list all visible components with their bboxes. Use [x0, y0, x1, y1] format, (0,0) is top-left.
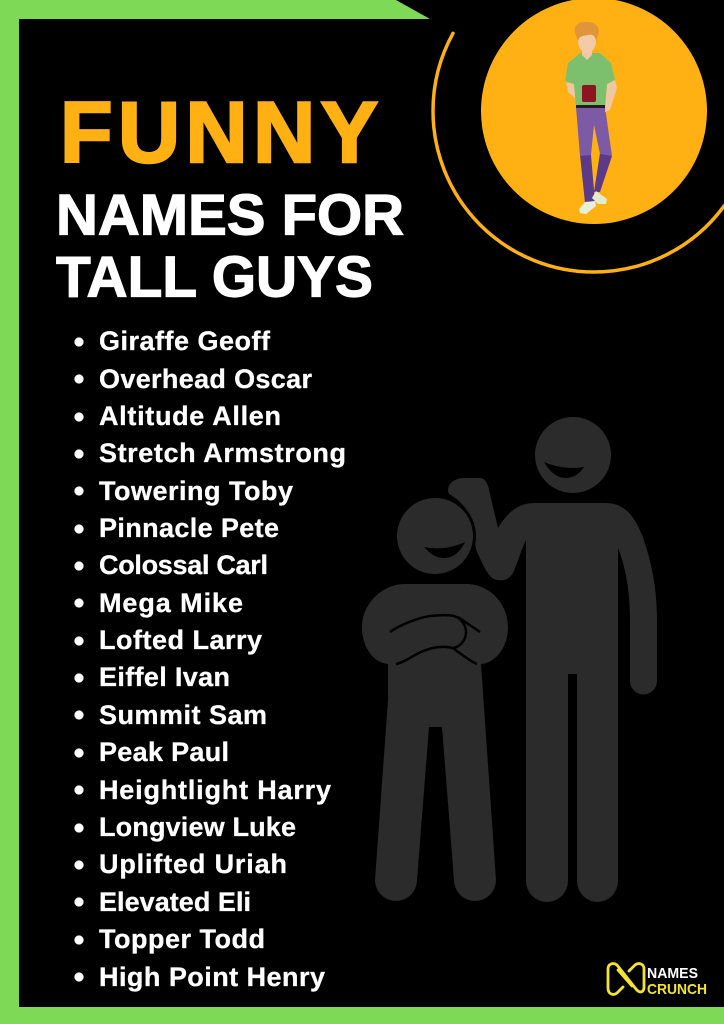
list of funny names: Longview Luke — [99, 812, 296, 842]
silhouette: tall and short figures — [362, 417, 657, 902]
list of funny names: Towering Toby — [99, 476, 293, 506]
list of funny names: Heightlight Harry — [99, 775, 331, 805]
list of funny names: Eiffel Ivan — [99, 662, 230, 692]
list of funny names: Stretch Armstrong — [99, 438, 346, 468]
title: TALL GUYS: TALL GUYS — [56, 246, 373, 310]
list of funny names: Mega Mike — [99, 588, 243, 618]
list of funny names: Summit Sam — [99, 700, 267, 730]
orange arc — [433, 33, 724, 272]
title: FUNNY: FUNNY — [60, 85, 378, 181]
list of funny names: Uplifted Uriah — [99, 849, 287, 879]
list of funny names: Altitude Allen — [99, 401, 281, 431]
list of funny names: High Point Henry — [99, 962, 325, 992]
list of funny names: Overhead Oscar — [99, 364, 312, 394]
smile and arm details — [390, 462, 584, 664]
icon: N mark — [608, 964, 644, 994]
list of funny names — [74, 326, 346, 992]
list of funny names: Topper Todd — [99, 924, 265, 954]
list of funny names: Giraffe Geoff — [99, 326, 271, 356]
figure: short man — [362, 495, 508, 901]
figure: tall man — [448, 417, 657, 902]
list of funny names: Colossal Carl — [99, 550, 268, 580]
title: NAMES FOR: NAMES FOR — [56, 184, 404, 248]
icon: man with mug — [565, 22, 617, 214]
orange circle with character — [481, 0, 707, 224]
list of funny names: Lofted Larry — [99, 625, 262, 655]
logo: Names Crunch — [608, 964, 707, 998]
list of funny names: Pinnacle Pete — [99, 513, 279, 543]
list of funny names: Elevated Eli — [99, 887, 251, 917]
list of funny names: Peak Paul — [99, 737, 229, 767]
logo: Names Crunch: NAMES — [647, 965, 698, 982]
logo: Names Crunch: CRUNCH — [647, 981, 707, 998]
